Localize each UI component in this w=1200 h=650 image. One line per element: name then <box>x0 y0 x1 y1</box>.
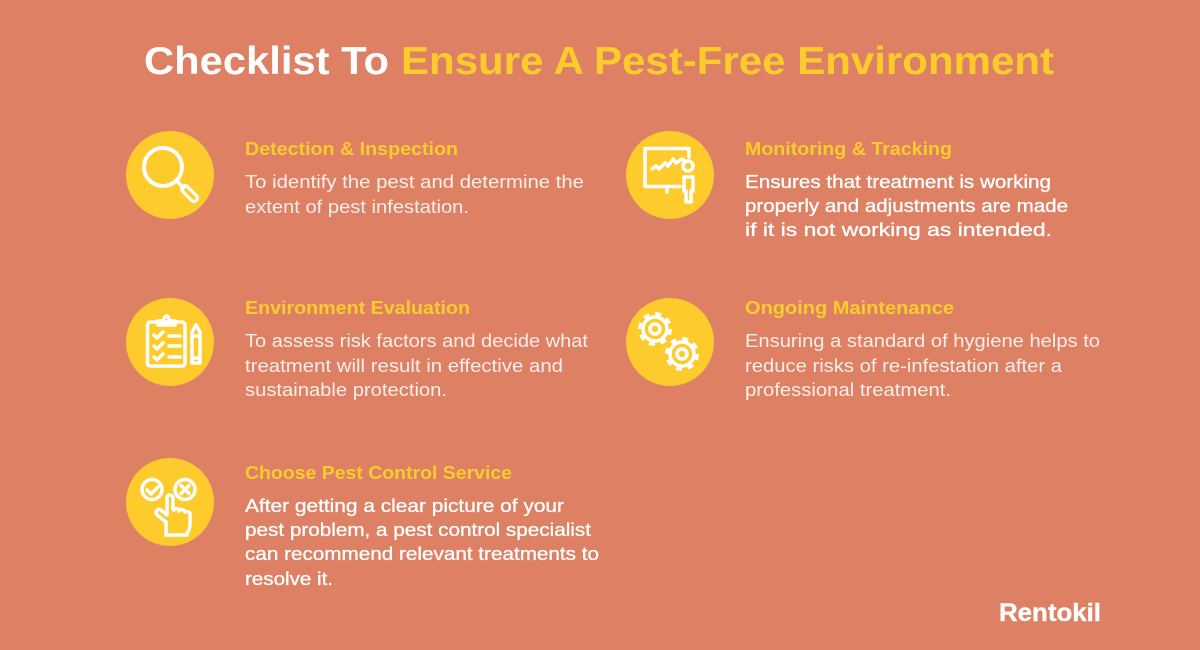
heading: environment evaluation: Environment Evaluation <box>245 298 470 318</box>
panel: ongoing maintenance <box>626 298 1100 400</box>
title: Ensure A Pest-Free Environment <box>401 40 1054 83</box>
heading: choose pest control service: Choose Pest Control Service <box>245 463 512 483</box>
text: monitoring and tracking: Ensures that treatment is working <box>745 172 1051 192</box>
text: ongoing maintenance: reduce risks of re-infestation after a <box>745 356 1063 376</box>
icon: presenter with chart <box>626 131 714 219</box>
panel: detection and inspection <box>126 131 584 219</box>
text: monitoring and tracking <box>745 172 1068 240</box>
text: environment evaluation: treatment will result in effective and <box>245 356 563 376</box>
text: ongoing maintenance <box>745 331 1100 400</box>
text: detection and inspection <box>245 172 584 217</box>
panel: environment evaluation <box>126 298 588 400</box>
panel: monitoring and tracking <box>626 131 1068 240</box>
panel: choose pest control service <box>126 458 599 589</box>
logo: Rentokil: Rentokil <box>999 599 1101 627</box>
title <box>144 40 1054 83</box>
text: ongoing maintenance: Ensuring a standard of hygiene helps to <box>745 331 1100 351</box>
icon: magnifying glass <box>126 131 214 219</box>
text: environment evaluation: sustainable protection. <box>245 380 447 400</box>
text: detection and inspection: To identify the pest and determine the <box>245 172 584 192</box>
heading: detection and inspection: Detection & Inspection <box>245 139 458 159</box>
text: choose pest control service: resolve it. <box>245 569 333 589</box>
text: monitoring and tracking: if it is not working as intended. <box>745 220 1052 240</box>
text: environment evaluation <box>245 331 588 400</box>
heading: ongoing maintenance: Ongoing Maintenance <box>745 298 954 318</box>
text: ongoing maintenance: professional treatment. <box>745 380 951 400</box>
text: choose pest control service: can recommend relevant treatments to <box>245 544 599 564</box>
icon: two gears <box>626 298 714 386</box>
text: monitoring and tracking: properly and adjustments are made <box>745 196 1068 216</box>
text: choose pest control service: After getting a clear picture of your <box>245 496 564 516</box>
heading: monitoring and tracking: Monitoring & Tracking <box>745 139 952 159</box>
title: Checklist To <box>144 40 389 83</box>
icon: hand choosing tick or cross <box>126 458 214 546</box>
icon: clipboard checklist and pencil <box>126 298 214 386</box>
text: choose pest control service: pest problem, a pest control specialist <box>245 520 591 540</box>
text: detection and inspection: extent of pest infestation. <box>245 197 469 217</box>
text: environment evaluation: To assess risk factors and decide what <box>245 331 588 351</box>
text: choose pest control service <box>245 496 599 589</box>
